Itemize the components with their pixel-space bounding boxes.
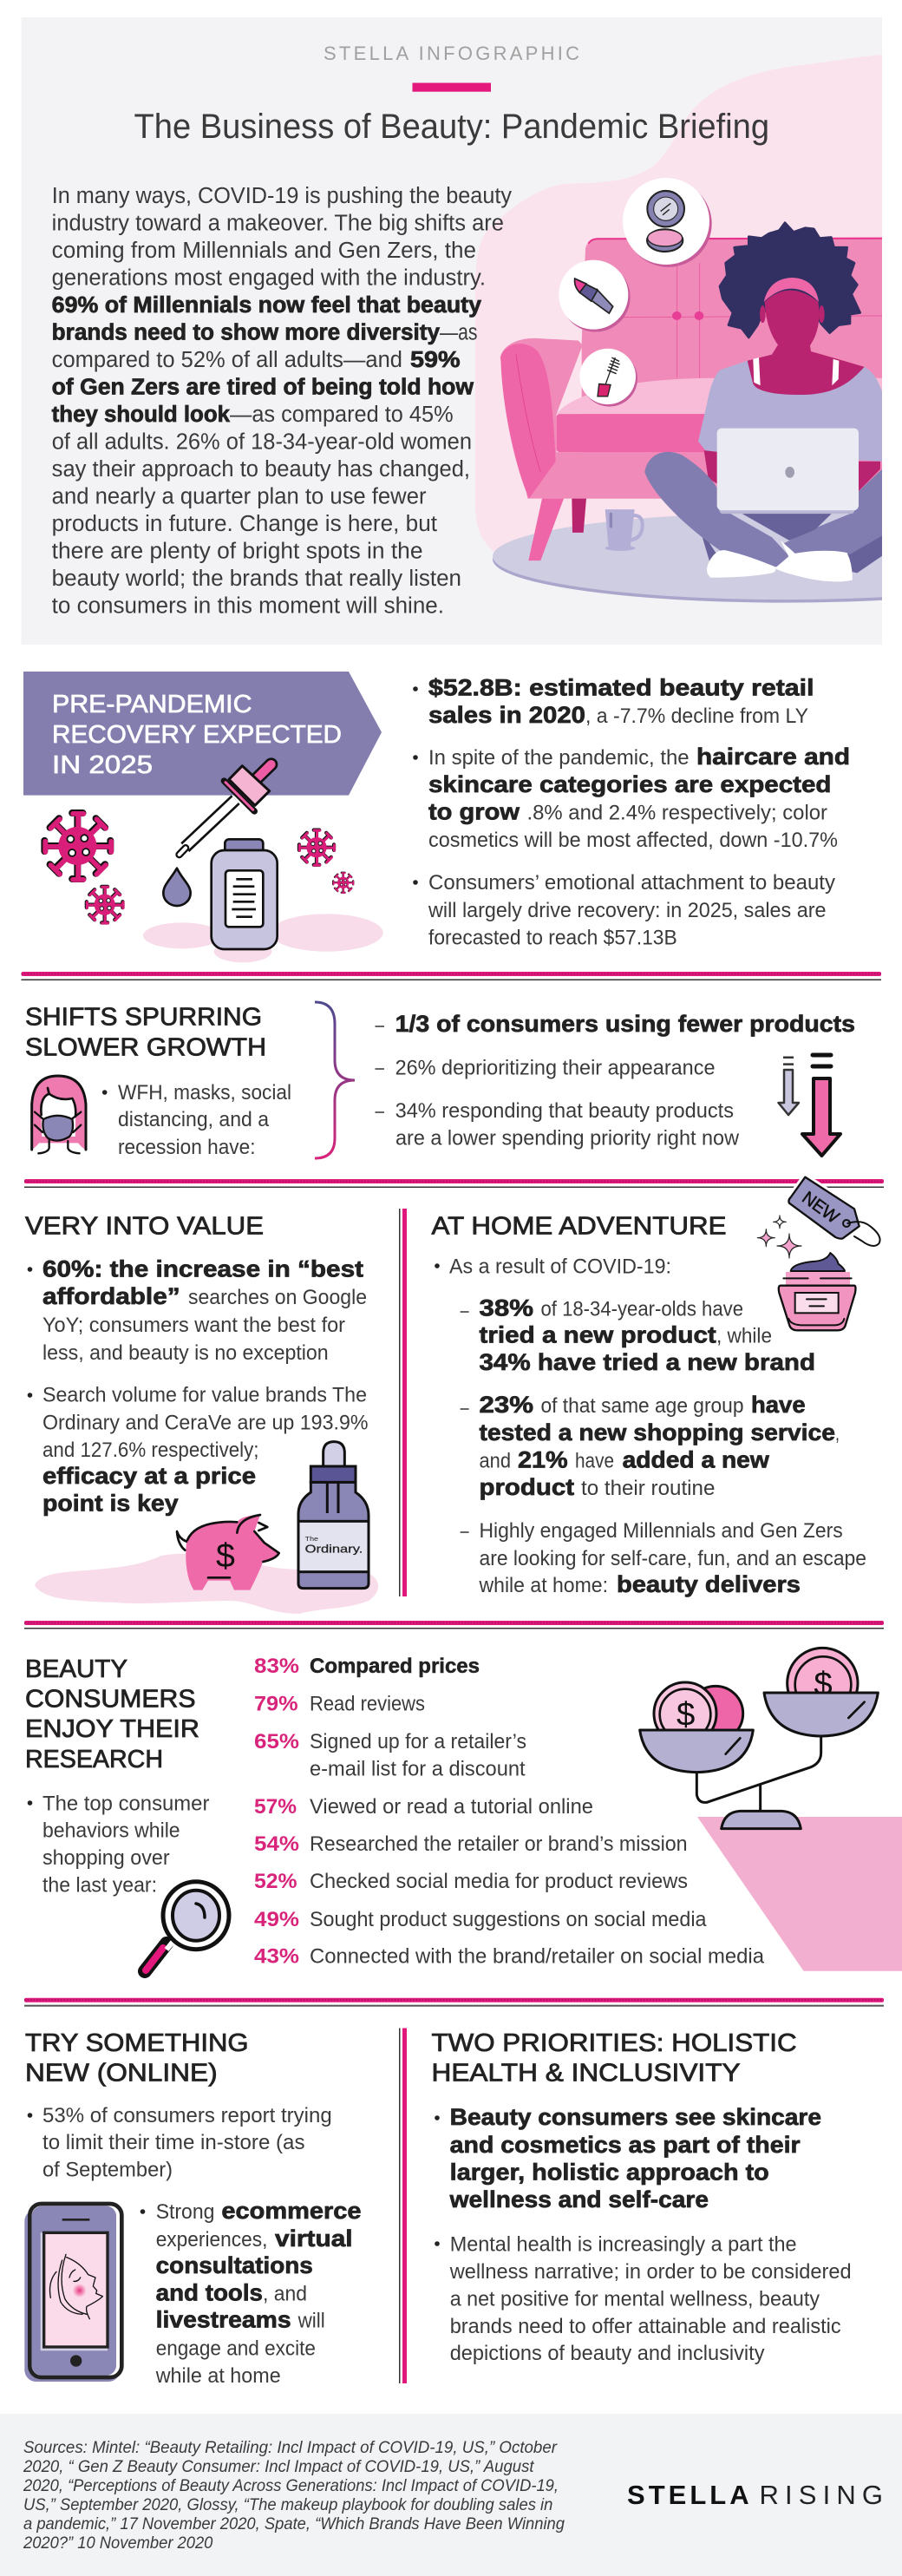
text: value bullets: less, and beauty is no exception (42, 1341, 329, 1365)
icon: virus medium (87, 887, 123, 923)
icon: balance scale with coins: $ (814, 1665, 833, 1702)
text: retail sales bullets: .8% and 2.4% respectively; color (527, 802, 827, 825)
heading: beauty consumers enjoy their research (25, 1655, 199, 1773)
heading: try something new online: NEW (ONLINE) (25, 2060, 218, 2088)
text: sources: 2020, “ Gen Z Beauty Consumer: Incl Impact of COVID-19, US,” August (23, 2458, 534, 2476)
intro paragraph: brands need to show more diversity (52, 321, 441, 345)
text: value bullets: Search volume for value brands The (42, 1384, 367, 1407)
icon: balance scale with coins: $ (676, 1695, 695, 1733)
heading: two priorities: TWO PRIORITIES: HOLISTIC (432, 2029, 797, 2057)
intro paragraph: industry toward a makeover. The big shifts are (52, 212, 504, 236)
heading: two priorities: HEALTH & INCLUSIVITY (432, 2060, 741, 2088)
text: ecommerce bullet: while at home (155, 2364, 281, 2388)
text: holistic bullets: wellness narrative; in order to be considered (449, 2260, 852, 2284)
vertical divider (399, 2029, 407, 2383)
text: ecommerce bullet: Strong (156, 2200, 214, 2224)
intro paragraph: say their approach to beauty has changed, (52, 457, 470, 482)
text: ecommerce bullet: will (297, 2310, 325, 2333)
text: at home adventure bullets: 23% (479, 1392, 533, 1418)
icon: bottle: Ordinary. (305, 1542, 363, 1555)
logo: Stella Rising (627, 2480, 883, 2510)
text: value bullets: and 127.6% respectively; (42, 1439, 258, 1462)
text: at home adventure bullets: of 18-34-year-olds have (541, 1298, 743, 1321)
brace connector (315, 1002, 355, 1158)
text: top consumer behaviors (28, 1793, 209, 1898)
text: at home adventure bullets: tried a new product (479, 1322, 716, 1348)
stat: 54%: Researched the retailer or brand’s mission (310, 1832, 688, 1856)
panel: footer (0, 2414, 902, 2576)
intro paragraph: and nearly a quarter plan to use fewer (52, 485, 427, 509)
heading: beauty consumers enjoy their research: RESEARCH (25, 1746, 163, 1773)
text: ecommerce bullet (141, 2198, 361, 2388)
text: at home adventure bullets: 34% have tried a new brand (479, 1349, 815, 1375)
background blob: value (35, 1554, 378, 1614)
text: at home adventure bullets: are looking for self-care, fun, and an escape (479, 1547, 866, 1570)
icon: serum bottle (212, 839, 278, 949)
heading: very into value: VERY INTO VALUE (25, 1213, 264, 1241)
text: sources: 2020?” 10 November 2020 (23, 2534, 213, 2553)
stat: 79%: Read reviews (310, 1693, 425, 1716)
text: value bullets: 60%: the increase in “best (42, 1256, 363, 1282)
text: at home adventure bullets (435, 1255, 866, 1597)
heading: two priorities (432, 2029, 797, 2088)
stat: 65% (254, 1730, 526, 1781)
heading: try something new online (25, 2029, 248, 2088)
text: at home adventure bullets: have (575, 1450, 614, 1473)
text: ecommerce bullet: ecommerce (221, 2198, 361, 2224)
text: retail sales bullets: will largely drive recovery: in 2025, sales are (428, 899, 826, 922)
icon: smartphone (24, 2204, 121, 2382)
text: holistic bullets: and cosmetics as part of their (450, 2132, 801, 2158)
stat: 79% (254, 1693, 425, 1716)
text: retail sales bullets: forecasted to reach $57.13B (428, 927, 677, 950)
text: retail sales bullets: sales in 2020 (428, 702, 585, 728)
illustration: woman with laptop on sofa (493, 178, 902, 603)
text: at home adventure bullets: 21% (518, 1447, 568, 1473)
text: value bullets: point is key (42, 1491, 179, 1517)
stat: 49%: 49% (254, 1908, 299, 1931)
banner: pre-pandemic recovery: RECOVERY EXPECTED (52, 721, 342, 749)
text: retail sales bullets: to grow (428, 799, 520, 825)
text: at home adventure bullets: while at home: (479, 1574, 608, 1597)
icon: droplet (163, 868, 191, 906)
text: ecommerce bullet: and tools (156, 2280, 263, 2306)
text: at home adventure bullets: , (835, 1422, 840, 1445)
stat: 65%: Signed up for a retailer’s (310, 1730, 526, 1753)
stat: 65%: e-mail list for a discount (310, 1758, 526, 1781)
heading: beauty consumers enjoy their research: BEAUTY (25, 1655, 127, 1683)
text: retail sales bullets (413, 675, 850, 950)
text: retail sales bullets: skincare categories are expected (428, 771, 831, 797)
intro paragraph: In many ways, COVID-19 is pushing the beauty (52, 184, 512, 208)
vertical divider (399, 1209, 407, 1596)
intro paragraph: 59% (410, 348, 461, 372)
text: holistic bullets: Beauty consumers see skincare (450, 2104, 821, 2130)
text: limit time in-store: to limit their time in-store (as (42, 2131, 305, 2154)
text: ecommerce bullet: livestreams (156, 2307, 291, 2333)
text: value bullets: efficacy at a price (42, 1463, 256, 1489)
text: value bullets: affordable” (42, 1283, 180, 1309)
text: consumer shift list: 1/3 of consumers using fewer products (395, 1011, 855, 1037)
text: holistic bullets: Mental health is increasingly a part the (450, 2232, 797, 2256)
text: at home adventure bullets: to their routine (581, 1477, 715, 1500)
icon: sparkles (757, 1216, 801, 1258)
heading: beauty consumers enjoy their research: ENJOY THEIR (25, 1715, 199, 1743)
icon: new tag: NEW (798, 1188, 843, 1228)
text: holistic bullets: depictions of beauty and inclusivity (450, 2342, 765, 2365)
stat: 83%: Compared prices (310, 1655, 480, 1678)
stats list: consumer behaviors (254, 1655, 765, 1969)
text: consumer shift list (375, 1011, 855, 1150)
text: consumer shift list: are a lower spending priority right now (395, 1126, 740, 1150)
text: retail sales bullets: , a -7.7% decline from LY (585, 705, 808, 728)
text: at home adventure bullets: of that same age group (541, 1394, 744, 1418)
background shape: pink trapezoid (697, 1817, 902, 1971)
heading: shifts spurring slower growth: SHIFTS SPURRING (25, 1003, 262, 1031)
background blob: hero (475, 55, 882, 555)
text: value bullets: YoY; consumers want the best for (42, 1314, 345, 1337)
icon: woman in mask (32, 1076, 86, 1153)
intro paragraph: of Gen Zers are tired of being told how (52, 376, 474, 400)
intro paragraph: they should look (52, 403, 231, 427)
text: sources (23, 2439, 565, 2553)
intro paragraph: 69% of Millennials now feel that beauty (52, 293, 482, 318)
text: at home adventure bullets: added a new (623, 1447, 769, 1473)
banner: pre-pandemic recovery: PRE-PANDEMIC (52, 691, 252, 718)
text: ecommerce bullet: , and (263, 2282, 307, 2306)
text: consumer shift list: 34% responding that beauty products (395, 1099, 734, 1123)
text: top consumer behaviors: shopping over (42, 1846, 170, 1870)
text: ecommerce bullet: virtual (275, 2225, 353, 2252)
text: sources: US,” September 2020, Glossy, “The makeup playbook for doubling sales in (23, 2496, 552, 2514)
text: value bullets (28, 1256, 368, 1517)
icon: cream jar (779, 1253, 855, 1330)
text: retail sales bullets: In spite of the pandemic, the (428, 746, 690, 770)
intro paragraph: there are plenty of bright spots in the (52, 540, 422, 564)
stat: 65%: 65% (254, 1730, 299, 1753)
text: sources: 2020, “Perceptions of Beauty Across Generations: Incl Impact of COVID-19, (23, 2477, 559, 2495)
label: Stella Infographic: STELLA INFOGRAPHIC (324, 43, 579, 64)
heading: try something new online: TRY SOMETHING (25, 2029, 248, 2057)
stat: 57%: 57% (254, 1795, 297, 1819)
accent bar (413, 83, 491, 92)
text: limit time in-store: 53% of consumers report trying (42, 2104, 332, 2127)
stat: 49%: Sought product suggestions on social media (310, 1908, 707, 1931)
icon: magnifying glass (145, 1882, 229, 1971)
text: at home adventure bullets: and (479, 1450, 511, 1473)
stat: 43%: Connected with the brand/retailer on social media (310, 1945, 765, 1969)
text: limit time in-store (28, 2104, 332, 2182)
text: ecommerce bullet: experiences, (156, 2228, 267, 2252)
text: WFH bullet (102, 1081, 291, 1159)
heading: shifts spurring slower growth: SLOWER GROWTH (25, 1034, 266, 1062)
stat: 79%: 79% (254, 1693, 298, 1716)
text: WFH bullet: recession have: (118, 1136, 255, 1159)
woman (644, 223, 882, 581)
bubble: mascara (579, 349, 637, 407)
icon: new tag (788, 1177, 880, 1246)
stat: 57%: Viewed or read a tutorial online (310, 1795, 593, 1819)
text: top consumer behaviors: behaviors while (42, 1819, 180, 1843)
icons: piggy bank and The Ordinary bottle (177, 1442, 369, 1590)
icon: bottle (298, 1442, 369, 1589)
icon: bottle: The (305, 1535, 318, 1543)
text: at home adventure bullets: 38% (479, 1295, 533, 1321)
stat: 54%: 54% (254, 1832, 299, 1856)
text: holistic bullets (435, 2104, 852, 2365)
text: at home adventure bullets: Highly engaged Millennials and Gen Zers (479, 1519, 843, 1543)
text: holistic bullets: brands need to offer attainable and realistic (450, 2315, 841, 2338)
text: ecommerce bullet: engage and excite (156, 2337, 316, 2361)
text: value bullets: Ordinary and CeraVe are up 193.9% (42, 1412, 368, 1435)
text: retail sales bullets: haircare and (696, 744, 850, 770)
text: holistic bullets: larger, holistic approach to (450, 2159, 769, 2185)
intro paragraph (52, 184, 512, 619)
panel: intro background (21, 17, 882, 645)
icons: new tag, sparkles and cream jar (757, 1177, 880, 1330)
stat: 52%: 52% (254, 1870, 297, 1893)
text: at home adventure bullets: have (751, 1392, 806, 1418)
text: top consumer behaviors: The top consumer (42, 1793, 209, 1816)
text: consumer shift list: 26% deprioritizing their appearance (395, 1057, 715, 1079)
intro paragraph: compared to 52% of all adults—and (52, 348, 402, 372)
icon: down arrows (779, 1055, 840, 1156)
title: The Business of Beauty: Pandemic Briefing (134, 108, 769, 146)
heading: shifts spurring slower growth (25, 1003, 266, 1062)
text: value bullets: searches on Google (188, 1286, 367, 1309)
text: at home adventure bullets: , while (716, 1325, 772, 1348)
bubble: lipstick (559, 260, 631, 331)
icon: virus small (333, 873, 353, 893)
intro paragraph: products in future. Change is here, but (52, 512, 437, 536)
text: WFH bullet: WFH, masks, social (118, 1081, 291, 1104)
icon: piggy bank (177, 1515, 279, 1590)
intro paragraph: —as compared to 45% (230, 403, 454, 427)
text: at home adventure bullets: tested a new shopping service (479, 1419, 835, 1445)
stat: 43%: 43% (254, 1945, 299, 1969)
heading: at home adventure: AT HOME ADVENTURE (432, 1213, 727, 1241)
text: limit time in-store: of September) (42, 2159, 173, 2182)
icon: virus large (44, 813, 111, 880)
text: at home adventure bullets: As a result of COVID-19: (449, 1255, 671, 1278)
text: retail sales bullets: Consumers’ emotional attachment to beauty (428, 871, 835, 895)
illustration: dropper, serum bottle and viruses (44, 764, 383, 962)
text: holistic bullets: wellness and self-care (449, 2186, 709, 2212)
text: WFH bullet: distancing, and a (118, 1108, 270, 1131)
text: at home adventure bullets: product (479, 1474, 574, 1500)
text: sources: Sources: Mintel: “Beauty Retailing: Incl Impact of COVID-19, US,” October (23, 2439, 558, 2457)
text: retail sales bullets: $52.8B: estimated beauty retail (428, 675, 814, 701)
text: retail sales bullets: cosmetics will be most affected, down -10.7% (428, 829, 838, 852)
bubble: compact (623, 178, 712, 267)
heading: beauty consumers enjoy their research: CONSUMERS (25, 1686, 195, 1714)
text: ecommerce bullet: consultations (156, 2252, 313, 2278)
text: sources: a pandemic,” 17 November 2020, Spate, “Which Brands Have Been Winning (23, 2515, 565, 2533)
icon: virus right (299, 830, 335, 865)
intro paragraph: generations most engaged with the industry. (52, 266, 486, 291)
icon: piggy bank: $ (216, 1537, 235, 1575)
logo: Stella Rising: RISING (760, 2480, 883, 2510)
intro paragraph: —as (440, 321, 477, 345)
intro paragraph: of all adults. 26% of 18-34-year-old women (52, 430, 472, 455)
icon: balance scale with coins (640, 1648, 878, 1829)
intro paragraph: beauty world; the brands that really listen (52, 567, 461, 591)
text: top consumer behaviors: the last year: (42, 1874, 157, 1898)
icon: pipette (180, 764, 271, 855)
intro paragraph: coming from Millennials and Gen Zers, the (52, 239, 476, 263)
intro paragraph: to consumers in this moment will shine. (52, 594, 444, 619)
logo: Stella Rising: STELLA (627, 2480, 749, 2510)
text: at home adventure bullets: beauty delivers (617, 1571, 801, 1597)
mug (605, 509, 643, 551)
stat: 52%: Checked social media for product reviews (310, 1870, 688, 1893)
banner: pre-pandemic recovery (23, 672, 382, 796)
text: holistic bullets: a net positive for mental wellness, beauty (450, 2287, 820, 2311)
banner: pre-pandemic recovery: IN 2025 (52, 751, 153, 779)
stat: 83%: 83% (254, 1655, 299, 1678)
